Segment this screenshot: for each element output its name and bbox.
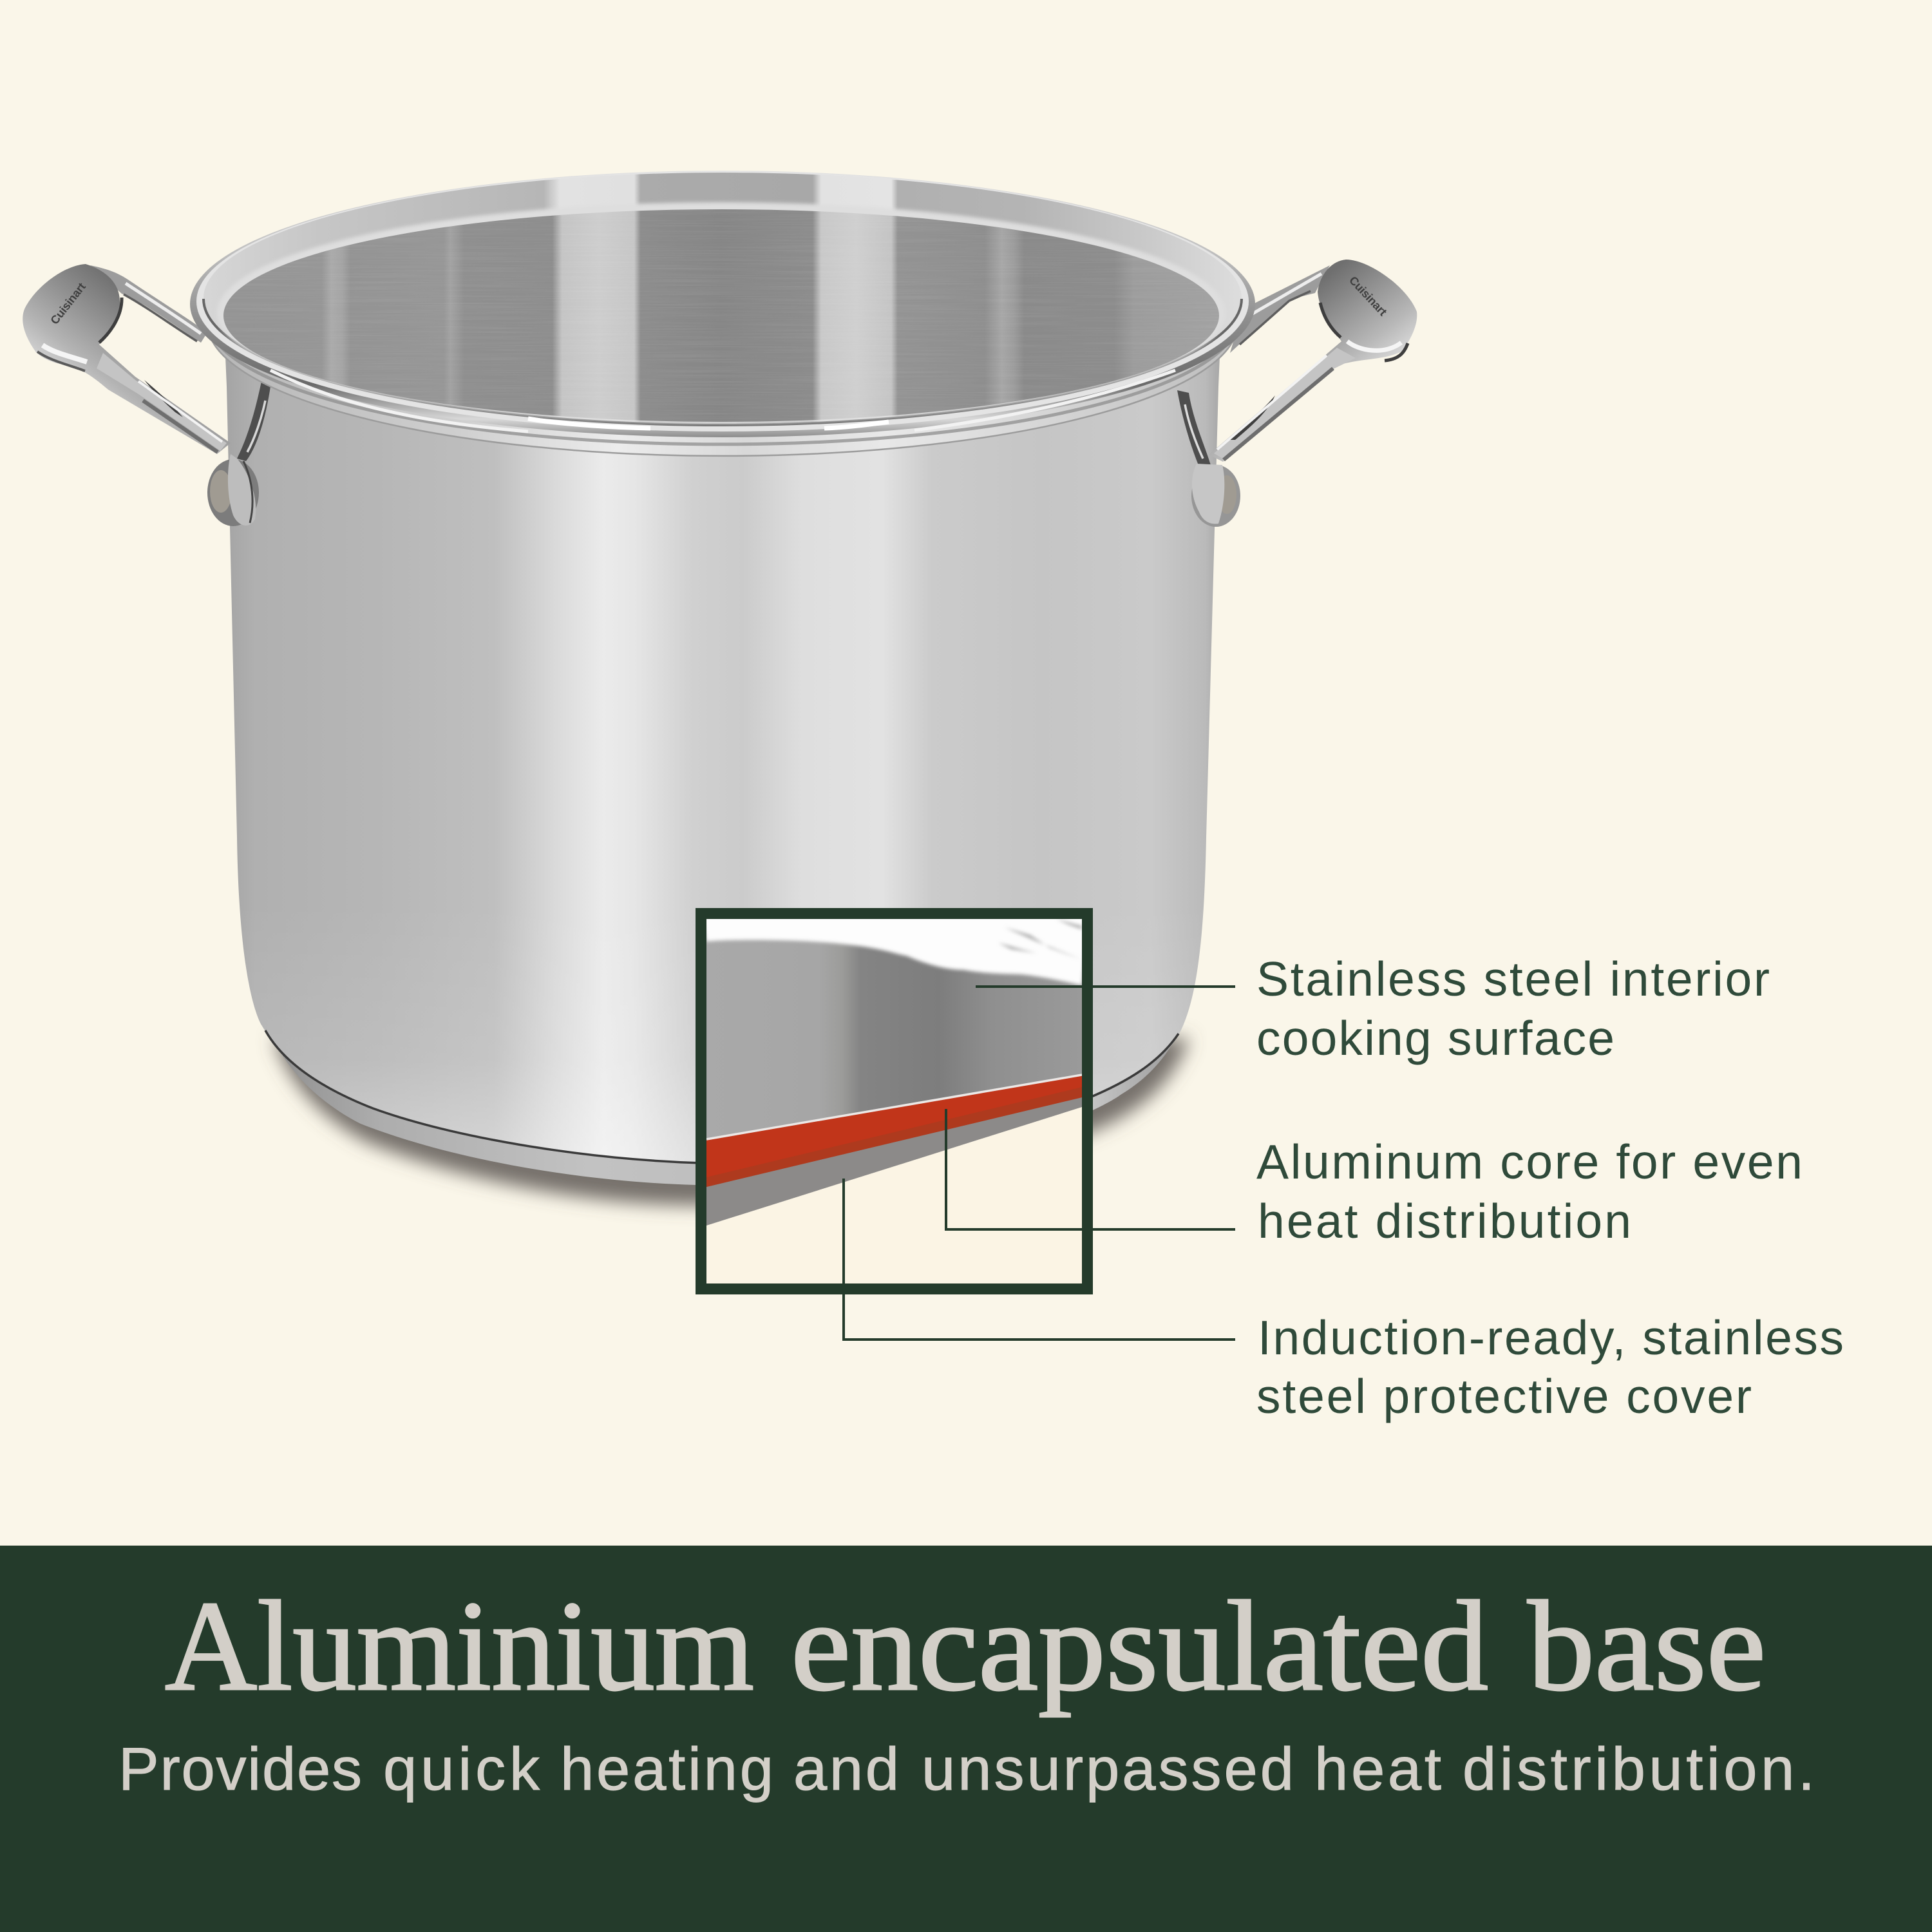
left strap bbox=[237, 381, 270, 461]
callout: stainless steel interior: cooking surface bbox=[1256, 1011, 1615, 1065]
right handle bbox=[1177, 260, 1417, 527]
right upper arm bbox=[1230, 265, 1330, 353]
stock pot bbox=[23, 171, 1417, 1206]
aluminum core lower shade bbox=[706, 1087, 1082, 1187]
pad highlights bbox=[1320, 303, 1408, 361]
pot body bbox=[225, 341, 1220, 1163]
rim bright highlights bbox=[528, 419, 889, 428]
left handle bbox=[23, 264, 270, 526]
reflection smudges bbox=[1000, 919, 1082, 956]
protective cover layer bbox=[706, 1088, 1082, 1226]
inset frame bbox=[701, 913, 1087, 1289]
banner subtitle: Provides bbox=[118, 1735, 362, 1803]
lower arm chrome bbox=[1214, 348, 1356, 460]
right strap bbox=[1177, 390, 1211, 467]
bottom banner bbox=[0, 1546, 1932, 1932]
callout: induction-ready cover: steel protective cover bbox=[1256, 1369, 1752, 1423]
highlight on steel interior bbox=[702, 914, 1088, 985]
brushed steel texture bbox=[665, 268, 728, 383]
callout line: protective cover bbox=[844, 1179, 1235, 1340]
left rivet bbox=[207, 454, 259, 526]
left pad and lower arm bbox=[23, 264, 231, 454]
banner subtitle: heating bbox=[560, 1735, 773, 1803]
handle logo: Cuisinart bbox=[48, 280, 88, 327]
handle logo: Cuisinart bbox=[1347, 274, 1390, 318]
inset cross-section of base bbox=[701, 913, 1088, 1289]
pot shadow bbox=[274, 1038, 1189, 1206]
callout: stainless steel interior: Stainless steel interior bbox=[1256, 952, 1770, 1006]
banner title: base bbox=[1528, 1575, 1766, 1718]
cream below pan bbox=[706, 1107, 1082, 1288]
pad highlights bbox=[37, 298, 122, 371]
banner subtitle: quick bbox=[383, 1735, 540, 1803]
callout: induction-ready cover: Induction-ready, stainless bbox=[1258, 1311, 1844, 1365]
banner subtitle: distribution. bbox=[1463, 1735, 1815, 1803]
aluminum core bbox=[706, 1075, 1082, 1187]
banner subtitle: and bbox=[793, 1735, 899, 1803]
pot rim and interior bbox=[190, 171, 1255, 456]
right pad and lower arm bbox=[1209, 260, 1417, 462]
right rivet bbox=[1191, 464, 1240, 527]
pot base bbox=[270, 1024, 1182, 1185]
banner subtitle: unsurpassed bbox=[922, 1735, 1294, 1803]
banner title: encapsulated bbox=[791, 1575, 1488, 1718]
callout line: steel interior bbox=[976, 985, 1235, 988]
callout: aluminum core: Aluminum core for even bbox=[1256, 1135, 1803, 1189]
banner title: Aluminium bbox=[165, 1575, 754, 1718]
callout line: aluminum core bbox=[946, 1109, 1235, 1229]
callout: aluminum core: heat distribution bbox=[1258, 1194, 1631, 1248]
interior edge line bbox=[706, 1075, 1082, 1139]
left upper arm bbox=[90, 265, 207, 343]
banner subtitle: heat bbox=[1314, 1735, 1441, 1803]
lower arm chrome bbox=[97, 353, 227, 452]
